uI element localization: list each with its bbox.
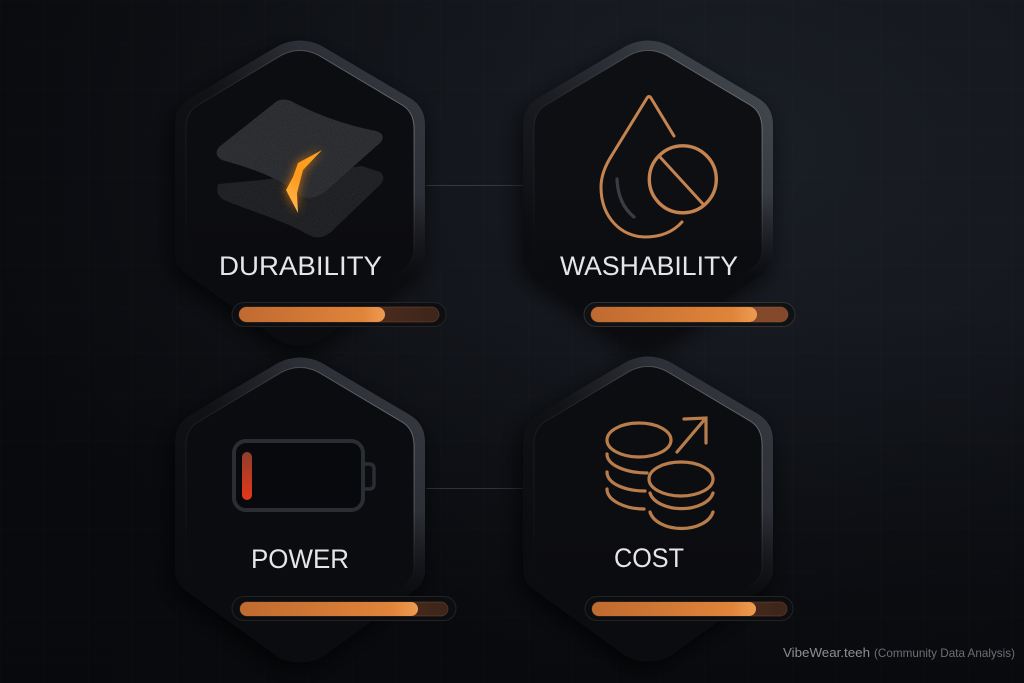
panel: washability [519, 40, 795, 354]
card: durability hexagon [171, 40, 425, 354]
progress bar: durability [232, 302, 446, 326]
icon: coin stacks with rising arrow [607, 418, 713, 528]
footer credit: (Community Data Analysis) [874, 646, 1015, 660]
heading: durability: DURABILITY [219, 251, 382, 281]
progress bar: washability [584, 302, 795, 326]
heading: power: POWER [251, 544, 349, 574]
icon: low battery [234, 441, 374, 510]
progress bar: cost [585, 596, 793, 620]
connector: top row [426, 184, 524, 186]
heading: washability: WASHABILITY [560, 251, 738, 281]
panel: durability [171, 40, 446, 354]
panel: power [171, 358, 456, 670]
card: cost hexagon [519, 356, 773, 670]
icon: water drop with prohibition sign [601, 96, 716, 237]
panel: cost [519, 356, 793, 670]
progress bar: power [232, 596, 456, 620]
heading: cost: COST [614, 543, 684, 573]
icon: torn fabric with glowing crack [217, 100, 383, 237]
card: power hexagon [171, 358, 425, 670]
footer credit [783, 645, 1015, 660]
connector: bottom row [426, 488, 524, 490]
card: washability hexagon [519, 40, 773, 354]
footer credit: VibeWear.teeh [783, 645, 870, 660]
